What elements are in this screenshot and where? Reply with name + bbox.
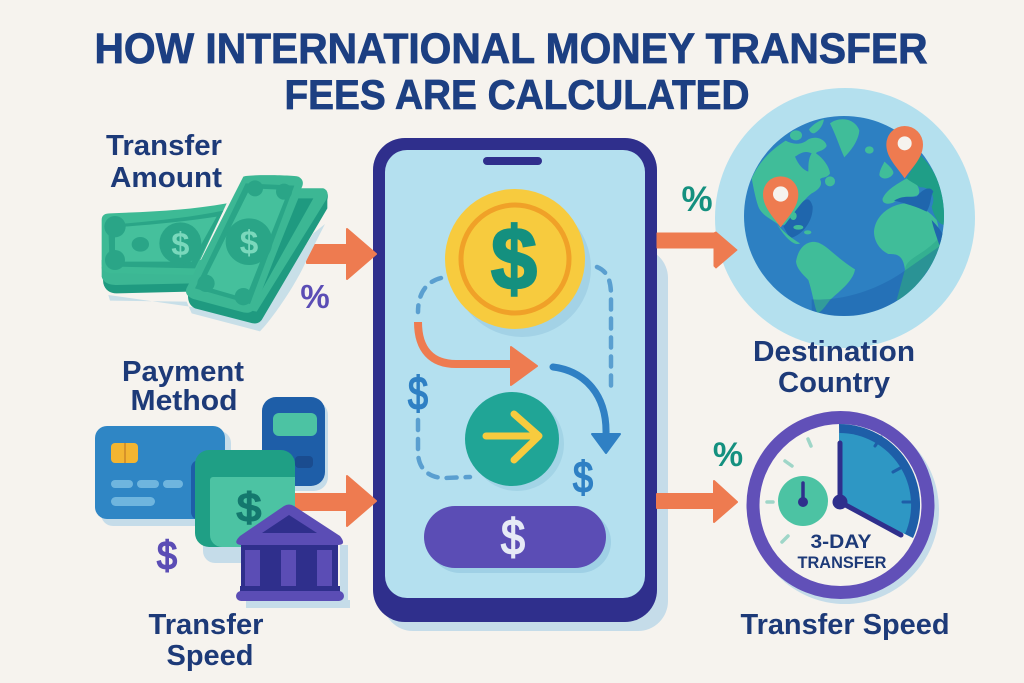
arrow: phone to destination	[657, 232, 737, 268]
icon: clock: 3-DAY	[810, 532, 872, 553]
panel: transfer amount	[102, 130, 376, 331]
icon: banknotes: $	[240, 225, 259, 262]
label: transfer amount: Transfer	[106, 130, 222, 162]
arrow: orange flow	[418, 322, 537, 385]
arrow: blue flow	[553, 367, 620, 453]
title: FEES ARE CALCULATED	[284, 71, 750, 118]
flow: dashed paths	[418, 267, 611, 478]
icon: small dollar right: $	[573, 453, 593, 502]
arrow: payment method to phone	[290, 476, 376, 526]
phone speaker	[483, 157, 542, 165]
icon: credit card	[95, 426, 231, 526]
clock blue sector	[839, 424, 920, 538]
icon: map pin east	[886, 126, 923, 178]
label: transfer speed left	[148, 609, 264, 672]
panel: destination country	[715, 88, 975, 399]
icon: clock	[751, 416, 939, 604]
title: HOW INTERNATIONAL MONEY TRANSFER	[94, 25, 928, 73]
phone shadow	[383, 248, 668, 631]
icon: globe	[715, 88, 975, 348]
icon: small dollar left: $	[408, 367, 428, 419]
icon: gold coin	[445, 189, 591, 337]
label: destination country	[753, 336, 915, 399]
percent sign teal lower: %	[713, 436, 743, 474]
arrow: transfer amount to phone	[307, 229, 376, 279]
icon: teal arrow circle	[465, 392, 564, 491]
label: transfer amount	[106, 130, 222, 194]
icon: mobile device	[262, 397, 328, 491]
icon: banknotes: $	[171, 225, 189, 262]
icon: map pin west	[763, 176, 798, 227]
label: destination country: Country	[778, 367, 890, 399]
button: dollar pill: $	[501, 509, 525, 565]
icon: dollar purple: $	[157, 534, 177, 578]
label: destination country: Destination	[753, 336, 915, 368]
label: transfer speed right: Transfer Speed	[740, 609, 950, 641]
panel: phone	[373, 138, 657, 622]
label: transfer speed left: Speed	[166, 640, 254, 672]
label: transfer amount: Amount	[110, 162, 222, 194]
icon: bank	[236, 504, 350, 608]
label: payment method: Method	[130, 385, 238, 417]
title	[94, 25, 928, 118]
icon: green wallet	[191, 450, 295, 563]
button: dollar pill	[424, 506, 611, 573]
icon: clock: TRANSFER	[798, 553, 886, 572]
percent sign purple: %	[300, 278, 330, 315]
arrow: phone to transfer speed	[657, 481, 737, 522]
percent sign teal upper: %	[681, 180, 713, 219]
label: payment method	[122, 356, 244, 417]
panel: transfer speed	[657, 416, 950, 641]
icon: banknotes	[102, 175, 328, 331]
icon: green wallet: $	[237, 486, 261, 530]
panel: payment method	[95, 356, 376, 672]
label: payment method: Payment	[122, 356, 244, 388]
label: transfer speed left: Transfer	[148, 609, 264, 641]
icon: gold coin: $	[491, 209, 537, 308]
